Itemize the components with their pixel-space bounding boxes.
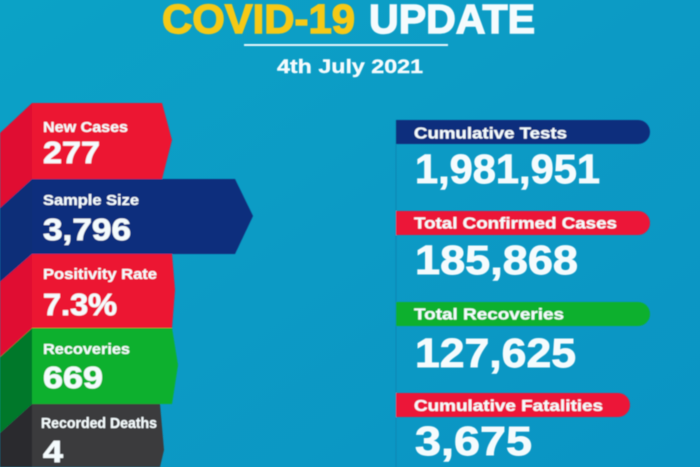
ribbon: recorded deaths [0,404,164,467]
stat: total recoveries: Total Recoveries [414,306,564,324]
ribbon: recoveries: Recoveries [43,342,130,358]
ribbon: sample size: Sample Size [43,193,139,209]
ribbon: positivity rate: Positivity Rate [43,267,157,283]
ribbon: recoveries: 669 [43,360,103,395]
header [162,0,535,78]
ribbon: new cases: New Cases [43,120,128,136]
ribbon: sample size: 3,796 [43,212,131,247]
stat: total confirmed cases: 185,868 [415,237,578,283]
ribbon: new cases: 277 [43,135,100,170]
title [162,0,535,42]
panel: cumulative figures [396,120,650,467]
ribbon: positivity rate: 7.3% [43,287,117,322]
stat: total recoveries [396,302,650,376]
date: 4th July 2021 [277,57,424,78]
stat: cumulative fatalities: Cumulative Fatalities [414,398,603,415]
panel: daily figures [0,103,253,467]
ribbon: sample size [0,179,253,282]
stat: cumulative tests: 1,981,951 [415,146,600,192]
ribbon: new cases [0,103,172,209]
stat: total recoveries: 127,625 [415,330,576,376]
ribbon: recoveries [0,328,178,433]
stat: total confirmed cases [396,211,650,283]
stat: cumulative fatalities [396,393,630,464]
stat: cumulative tests: Cumulative Tests [414,126,567,142]
stat: cumulative tests [396,120,650,192]
ribbon: recorded deaths: Recorded Deaths [41,416,157,432]
stat: cumulative fatalities: 3,675 [415,418,532,464]
stat: total confirmed cases: Total Confirmed Cases [414,216,617,232]
ribbon: positivity rate [0,254,175,357]
